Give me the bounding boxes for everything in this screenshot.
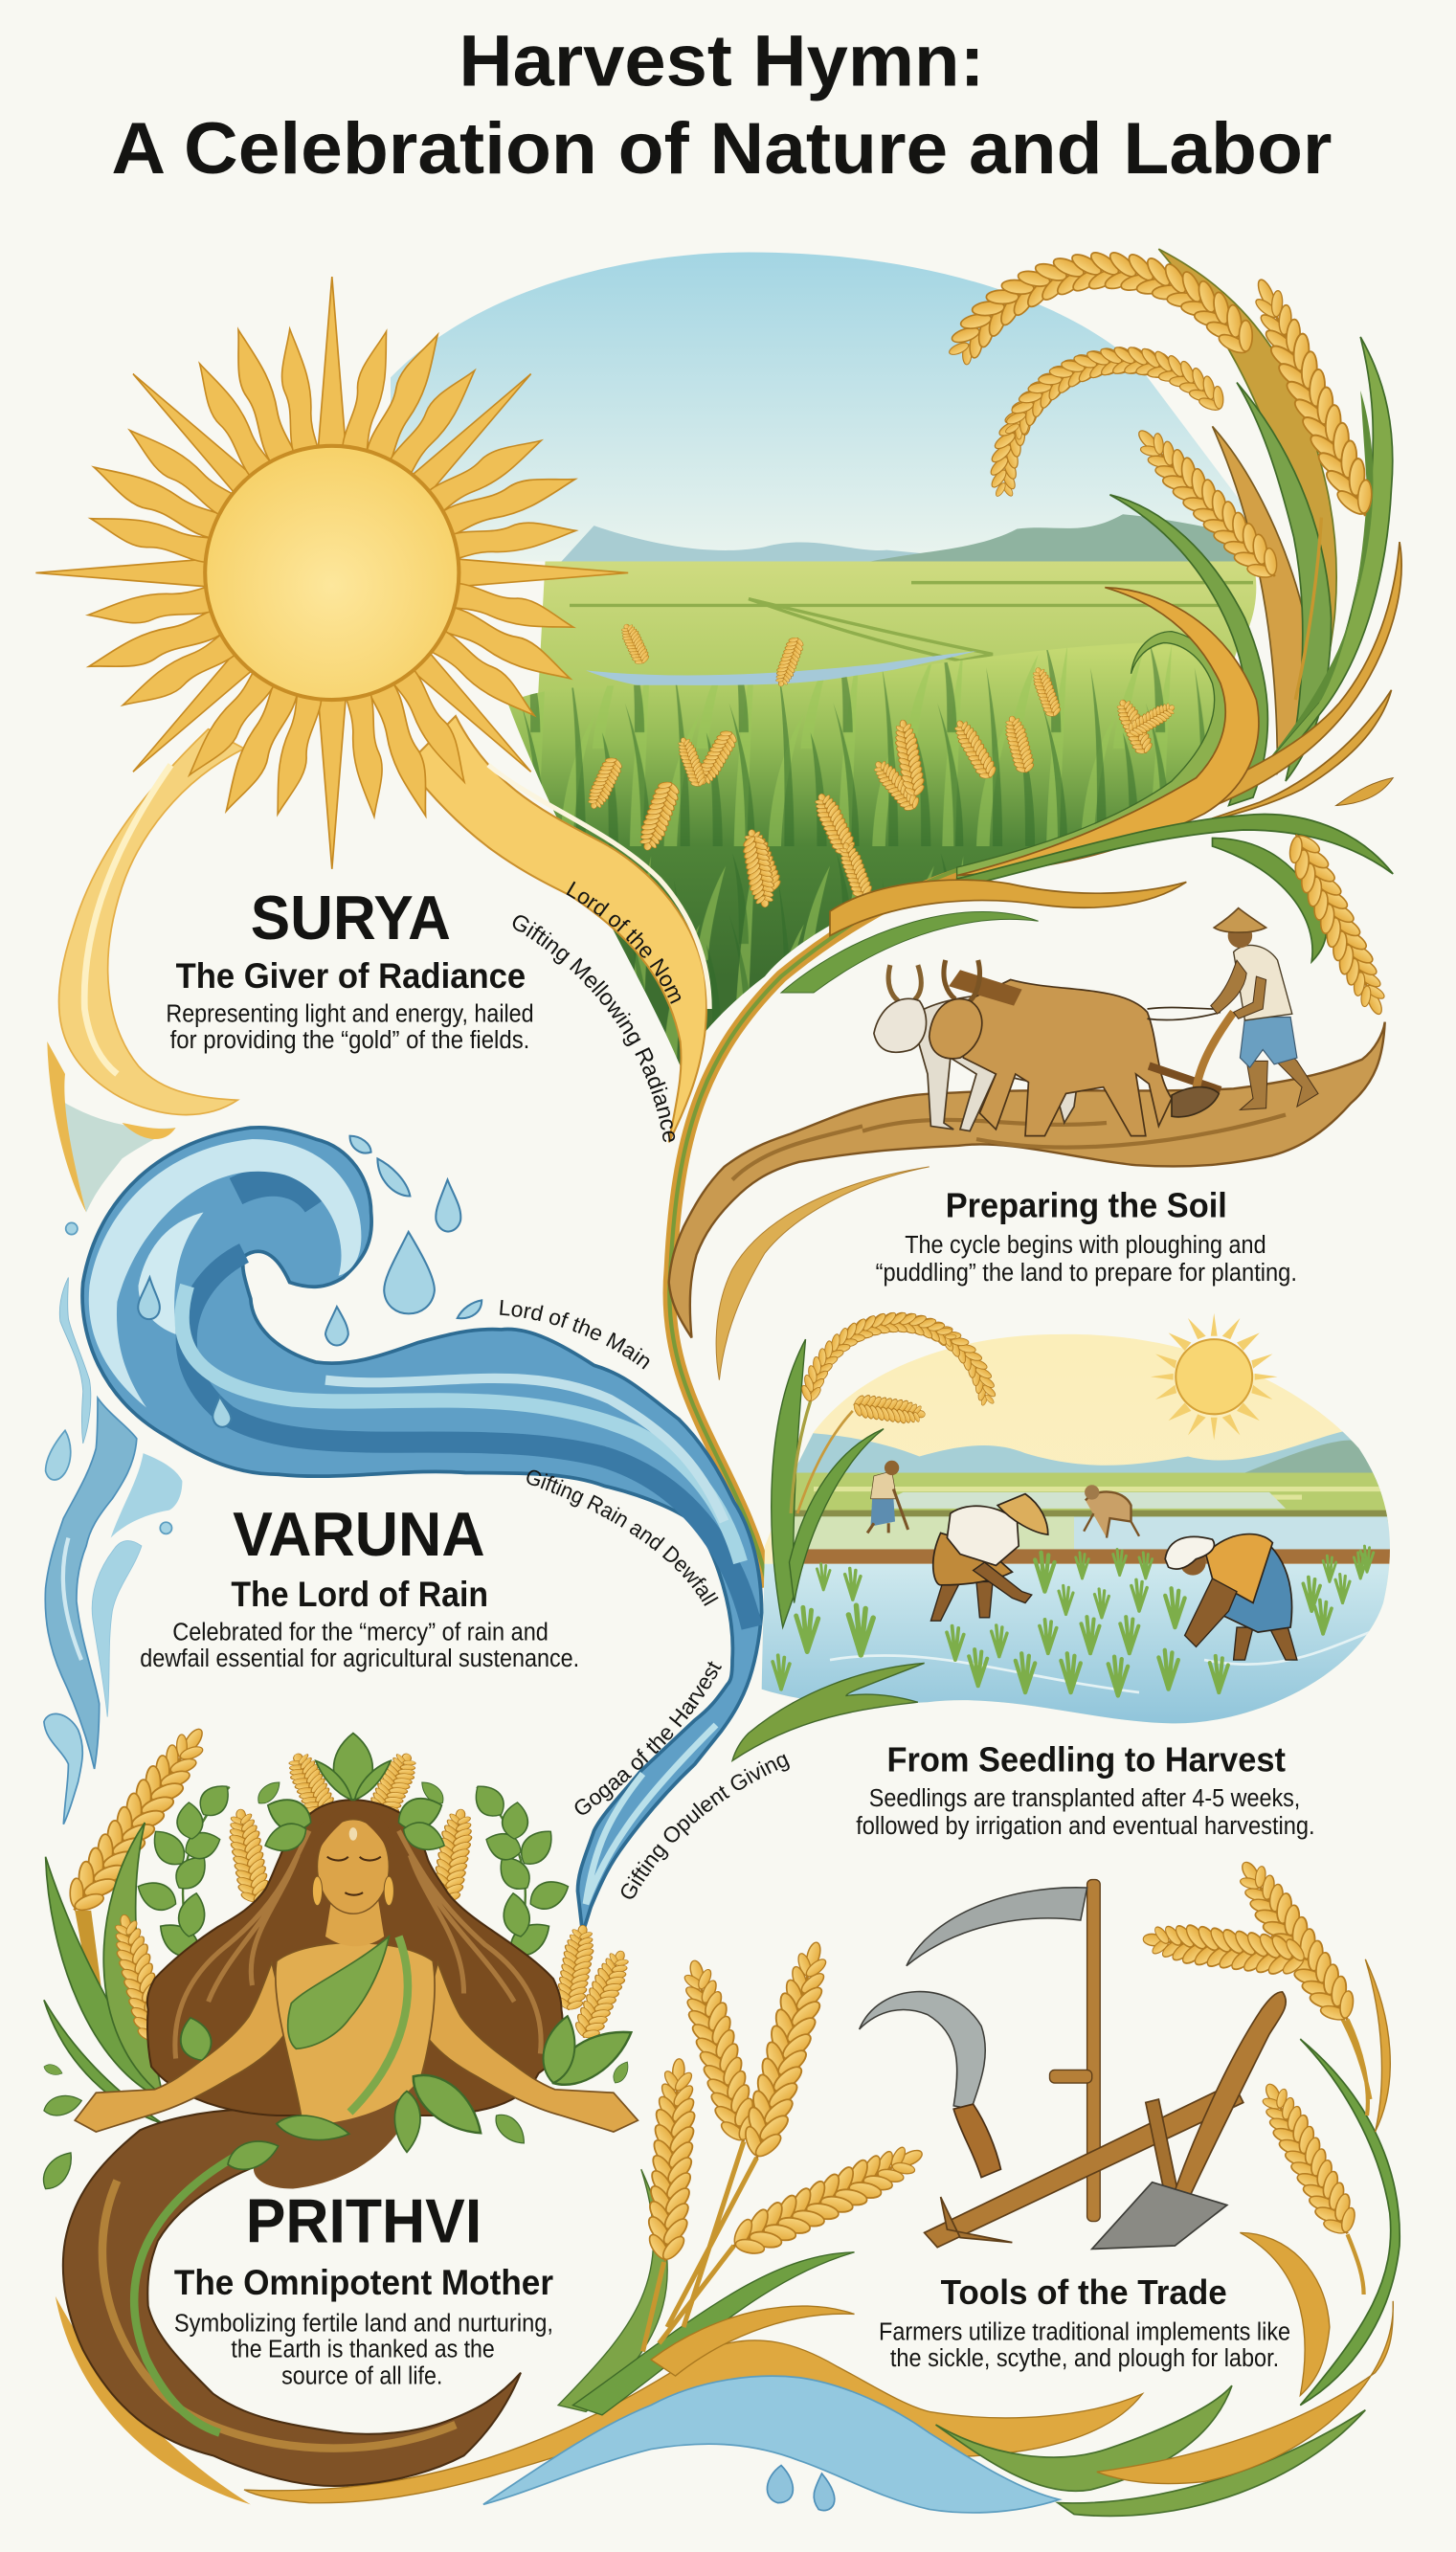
- tall green leaf: [1237, 337, 1393, 797]
- wave: [82, 1128, 762, 1934]
- ox: white: [874, 965, 1087, 1131]
- text: Prithvi: the Earth is thanked as the: [231, 2336, 495, 2362]
- worker far left: [867, 1461, 908, 1533]
- worker with headscarf: [1165, 1534, 1297, 1660]
- text: From Seedling to Harvest: Seedlings are transplanted after 4-5 weeks,: [869, 1785, 1300, 1812]
- farmer: [1211, 908, 1318, 1109]
- wavy gold blade: [830, 880, 1186, 936]
- text: Preparing the Soil: [876, 1187, 1297, 1287]
- ox: brown: [930, 960, 1172, 1136]
- curved epithets: Surya: Gifting Mellowing Radiance: [513, 915, 676, 1143]
- torso and dress: [276, 1942, 435, 2128]
- green curl: [957, 632, 1230, 879]
- icon: sun: [35, 277, 628, 869]
- text: Surya: SURYA: [251, 884, 451, 952]
- seedlings: [773, 1546, 1374, 1695]
- curved epithets: Prithvi: Gifting Opulent Giving: [620, 1754, 790, 1899]
- plough and reins: [1148, 1008, 1234, 1117]
- plough: [925, 1992, 1286, 2249]
- ribbon: sun stream to the right carrying epithets: [407, 716, 709, 1142]
- worker far right: [1084, 1485, 1139, 1538]
- leaves around the goddess: [175, 2013, 640, 2176]
- text: Varuna: dewfail essential for agricultural sustenance.: [140, 1645, 579, 1672]
- text: Prithvi: [174, 2187, 553, 2390]
- goddess Prithvi: [36, 1715, 640, 2486]
- tools: [860, 1880, 1286, 2249]
- text: Surya: [166, 884, 534, 1054]
- text: Surya: for providing the “gold” of the fields.: [170, 1027, 529, 1054]
- text: Prithvi: source of all life.: [281, 2363, 442, 2390]
- neck and face: [325, 1896, 384, 1946]
- soil band: [669, 1022, 1385, 1337]
- main stem: [669, 874, 960, 1587]
- water droplets: [138, 1136, 482, 1427]
- text: Varuna: The Lord of Rain: [231, 1574, 488, 1614]
- text: Tools of the Trade: Farmers utilize traditional implements like: [879, 2319, 1290, 2346]
- small sun: [1151, 1313, 1278, 1441]
- side plants: [36, 1715, 638, 2194]
- root tail: [63, 2109, 521, 2486]
- text: Tools of the Trade: [879, 2273, 1290, 2372]
- rice plant beside paddy: [732, 1270, 999, 1760]
- gold curl: [957, 588, 1259, 876]
- text: From Seedling to Harvest: [856, 1740, 1315, 1840]
- text: From Seedling to Harvest: From Seedling to Harvest: [887, 1740, 1286, 1779]
- curled green leaf: [1109, 495, 1267, 806]
- text: Preparing the Soil: Preparing the Soil: [946, 1187, 1227, 1225]
- curved epithets: Prithvi: Gogaa of the Harvest: [574, 1661, 722, 1815]
- central wheat sheaf: [558, 1936, 932, 2415]
- ribbon: sun stream to the left: [47, 729, 244, 1213]
- text: Varuna: Celebrated for the “mercy” of rain and: [172, 1620, 549, 1646]
- grain ears: [1295, 518, 1321, 700]
- text: Prithvi: Symbolizing fertile land and nurturing,: [174, 2310, 553, 2337]
- laurel branches: [132, 1778, 573, 1964]
- tall gold-green leaf: [1158, 249, 1336, 757]
- text: Tools of the Trade: the sickle, scythe, and plough for labor.: [890, 2345, 1279, 2372]
- rice stalk bundle: upper right: [669, 179, 1401, 1587]
- small wheat behind head: [222, 1746, 480, 1906]
- scythe: [907, 1880, 1100, 2222]
- side water stream: [44, 1222, 182, 1824]
- curved epithets: Varuna: Gifting Rain and Dewfall: [526, 1470, 718, 1606]
- curved epithets: Varuna: [500, 1300, 718, 1606]
- wave bands: [187, 1253, 751, 1627]
- text: Preparing the Soil: “puddling” the land to prepare for planting.: [876, 1260, 1297, 1287]
- landscape: sky and rice field: [391, 253, 1286, 1066]
- text: Tools of the Trade: Tools of the Trade: [941, 2273, 1227, 2312]
- text: Prithvi: PRITHVI: [246, 2187, 482, 2256]
- title: [111, 20, 1332, 190]
- text: Varuna: [140, 1500, 579, 1672]
- right wheat: [1140, 1849, 1370, 2295]
- small green blade: [781, 911, 1039, 993]
- rice ears in the field: [582, 620, 1179, 909]
- soil and plough scene: [669, 908, 1385, 1380]
- curved epithets: Prithvi: [574, 1661, 790, 1899]
- worker with conical hat: [930, 1494, 1055, 1621]
- bottom swoosh: gold ribbons, water, green leaves: [56, 1959, 1400, 2516]
- text: Prithvi: The Omnipotent Mother: [174, 2262, 553, 2302]
- curved epithets: Surya: Lord of the Nom: [567, 881, 682, 1004]
- title: Harvest Hymn:: [459, 20, 985, 101]
- title: A Celebration of Nature and Labor: [111, 108, 1332, 190]
- long gold leaf: [1074, 542, 1401, 839]
- text: Surya: Representing light and energy, hailed: [166, 1001, 534, 1028]
- text: Surya: The Giver of Radiance: [176, 955, 526, 996]
- text: From Seedling to Harvest: followed by irrigation and eventual harvesting.: [856, 1813, 1315, 1840]
- curved epithets: Varuna: Lord of the Main: [500, 1300, 649, 1369]
- text: Varuna: VARUNA: [233, 1500, 485, 1569]
- text: Preparing the Soil: The cycle begins with ploughing and: [905, 1232, 1266, 1259]
- arms: [75, 1962, 638, 2132]
- paddy scene: [732, 1270, 1400, 1760]
- leaf crown: [260, 1734, 449, 1858]
- sickle: [860, 1992, 1001, 2178]
- hair: [147, 1800, 563, 2115]
- lower green blade: [957, 815, 1393, 888]
